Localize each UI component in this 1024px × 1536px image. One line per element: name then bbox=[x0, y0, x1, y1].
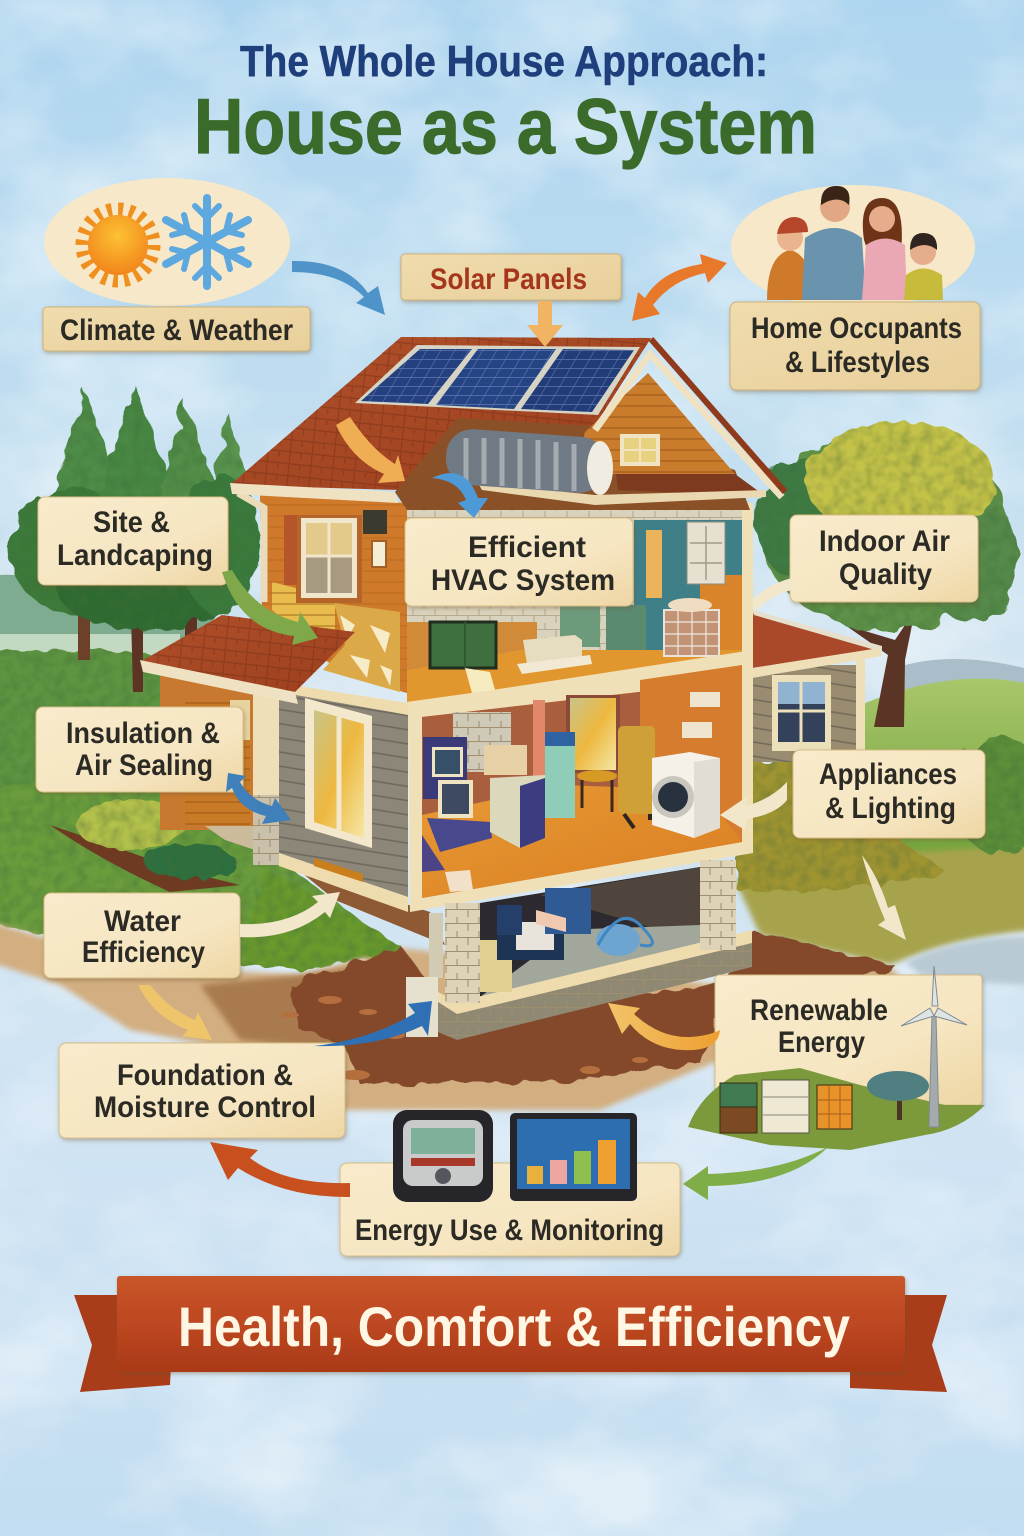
icon: wind turbine bbox=[901, 966, 967, 1127]
storage box bbox=[484, 745, 527, 775]
label: energy use bbox=[340, 1163, 680, 1256]
white box unit bbox=[517, 635, 592, 674]
left bushes band bbox=[0, 649, 200, 800]
title bbox=[194, 37, 817, 170]
left grass bbox=[0, 785, 400, 972]
label: insulation: Insulation & bbox=[66, 717, 220, 750]
icon: energy meter bbox=[393, 1110, 493, 1202]
sand and pale soil bbox=[0, 922, 900, 1110]
label: foundation: Moisture Control bbox=[94, 1091, 316, 1124]
banner left tail bbox=[74, 1295, 172, 1392]
label: home occupants: Home Occupants bbox=[751, 312, 962, 345]
label: indoor air quality: Indoor Air bbox=[819, 525, 950, 558]
pond bbox=[905, 936, 1024, 985]
label: efficient hvac: Efficient bbox=[468, 531, 586, 564]
label: appliances bbox=[793, 750, 985, 838]
arrow: solar panels down bbox=[527, 301, 563, 347]
arrow: attic blue bbox=[432, 473, 488, 518]
label: efficient hvac bbox=[405, 518, 633, 606]
gable trim bbox=[595, 354, 782, 497]
brown soil bbox=[290, 932, 895, 1084]
label: appliances: & Lighting bbox=[825, 792, 956, 825]
label: indoor air quality: Quality bbox=[839, 558, 932, 591]
dishwasher appliance bbox=[490, 775, 545, 848]
tree right bbox=[756, 422, 1018, 727]
arrow: climate to house bbox=[292, 261, 385, 315]
gable window bbox=[620, 434, 660, 466]
mid soil bbox=[200, 960, 400, 1060]
arrow: water yellow bbox=[138, 985, 212, 1040]
meadow right bbox=[860, 679, 1024, 860]
distant hills left bbox=[0, 575, 250, 662]
label: home occupants bbox=[730, 302, 980, 390]
label: water efficiency bbox=[44, 893, 240, 978]
banner right tail bbox=[850, 1295, 947, 1392]
label: indoor air quality bbox=[790, 515, 978, 602]
label: insulation: Air Sealing bbox=[75, 749, 213, 782]
arrow: indoor air bbox=[752, 578, 792, 612]
insulation roll bbox=[444, 427, 613, 495]
label: water efficiency: Efficiency bbox=[82, 936, 205, 969]
banner text: Health, Comfort & Efficiency bbox=[178, 1295, 850, 1358]
icon: tablet chart bbox=[510, 1113, 637, 1201]
gable wall bbox=[575, 373, 735, 474]
title: The Whole House Approach: bbox=[240, 37, 768, 86]
siding window bbox=[305, 698, 372, 848]
foundation bbox=[438, 935, 752, 1040]
upper left wall bbox=[238, 493, 407, 693]
back window bbox=[566, 695, 620, 773]
left small roof bbox=[140, 615, 355, 704]
upper window bbox=[296, 515, 362, 603]
green air handler bbox=[430, 622, 496, 668]
mulch bed bbox=[50, 825, 240, 892]
icon: snowflake bbox=[166, 198, 248, 286]
main siding wing bbox=[279, 683, 408, 912]
white shutter window bbox=[687, 522, 725, 584]
right wing bbox=[750, 610, 882, 762]
upper floor bbox=[407, 650, 742, 702]
panel: renewable energy bbox=[688, 966, 985, 1150]
attic interior bbox=[395, 339, 785, 510]
label: climate & weather: Climate & Weather bbox=[60, 314, 293, 347]
arrow: roof orange bbox=[336, 417, 405, 483]
house bbox=[140, 337, 882, 1040]
arrow: occupants two-way bbox=[632, 254, 727, 321]
panel: climate oval bbox=[44, 178, 290, 306]
pale lake left bbox=[0, 634, 180, 662]
basement equipment bbox=[480, 888, 652, 992]
label: efficient hvac: HVAC System bbox=[431, 564, 615, 597]
teal fridge bbox=[545, 732, 575, 818]
wire cage bbox=[664, 598, 719, 656]
label: foundation: Foundation & bbox=[117, 1059, 293, 1092]
label: climate & weather bbox=[43, 307, 310, 351]
arrow: appliances cream bbox=[720, 782, 787, 830]
downspout and drain box bbox=[406, 913, 443, 1037]
icon: tree bbox=[867, 1071, 929, 1120]
label: water efficiency: Water bbox=[104, 905, 181, 938]
wall insulation bbox=[323, 603, 400, 692]
main roof bbox=[230, 337, 651, 503]
right lawn bbox=[735, 845, 1024, 965]
heading: renewable energy: Energy bbox=[778, 1026, 865, 1059]
label: site and landscaping: Site & bbox=[93, 506, 170, 539]
label: energy use: Energy Use & Monitoring bbox=[355, 1214, 664, 1247]
room floor bbox=[422, 785, 742, 898]
heading: renewable energy: Renewable bbox=[750, 994, 888, 1027]
arrow: renewable to monitoring bbox=[683, 1147, 828, 1200]
trees left bbox=[10, 385, 260, 692]
crawl brick under wing bbox=[296, 868, 445, 945]
attic floor bbox=[478, 483, 766, 505]
basement bbox=[406, 860, 752, 1040]
label: solar panels: Solar Panels bbox=[430, 263, 587, 296]
icon: family bbox=[767, 186, 943, 300]
water heater bbox=[618, 726, 655, 828]
mountains right bbox=[895, 659, 1024, 690]
banner center bbox=[117, 1276, 905, 1372]
arrow: water cream bbox=[240, 892, 340, 937]
upper room bbox=[407, 503, 753, 716]
title: House as a System bbox=[194, 82, 817, 170]
heading: renewable energy bbox=[750, 994, 888, 1059]
label: home occupants: & Lifestyles bbox=[785, 346, 930, 379]
label: solar panels bbox=[401, 254, 621, 300]
left small wing bbox=[160, 665, 280, 865]
stones bbox=[281, 996, 648, 1080]
pillars bbox=[445, 903, 480, 1003]
label: appliances: Appliances bbox=[819, 758, 957, 791]
panel: family oval bbox=[731, 185, 975, 309]
solar panels bbox=[355, 345, 640, 415]
arrow: insulation blue bbox=[226, 773, 291, 824]
blue cabinet and windows bbox=[422, 737, 492, 872]
bushes bbox=[76, 737, 1024, 972]
icon: sun bbox=[82, 209, 154, 281]
label: site and landscaping: Landcaping bbox=[57, 539, 213, 572]
main floor cutaway bbox=[408, 650, 753, 912]
landscape background bbox=[0, 575, 1024, 1110]
arrow: renewable downward bbox=[862, 855, 906, 940]
wall units bbox=[682, 692, 720, 738]
back wall bbox=[422, 680, 742, 898]
label: insulation bbox=[36, 707, 243, 792]
label: site and landscaping bbox=[38, 497, 228, 585]
arrow: site green bbox=[222, 570, 318, 645]
stool bbox=[577, 770, 617, 812]
arrow: foundation blue bbox=[314, 1001, 432, 1046]
icon: battery units bbox=[720, 1080, 852, 1133]
label: foundation bbox=[59, 1043, 345, 1138]
washing machine bbox=[652, 752, 720, 838]
icon: green island bbox=[688, 1068, 985, 1150]
banner bbox=[74, 1276, 947, 1392]
arrow: monitoring to foundation bbox=[210, 1142, 350, 1197]
arrow: renewable orange bbox=[608, 1003, 720, 1050]
